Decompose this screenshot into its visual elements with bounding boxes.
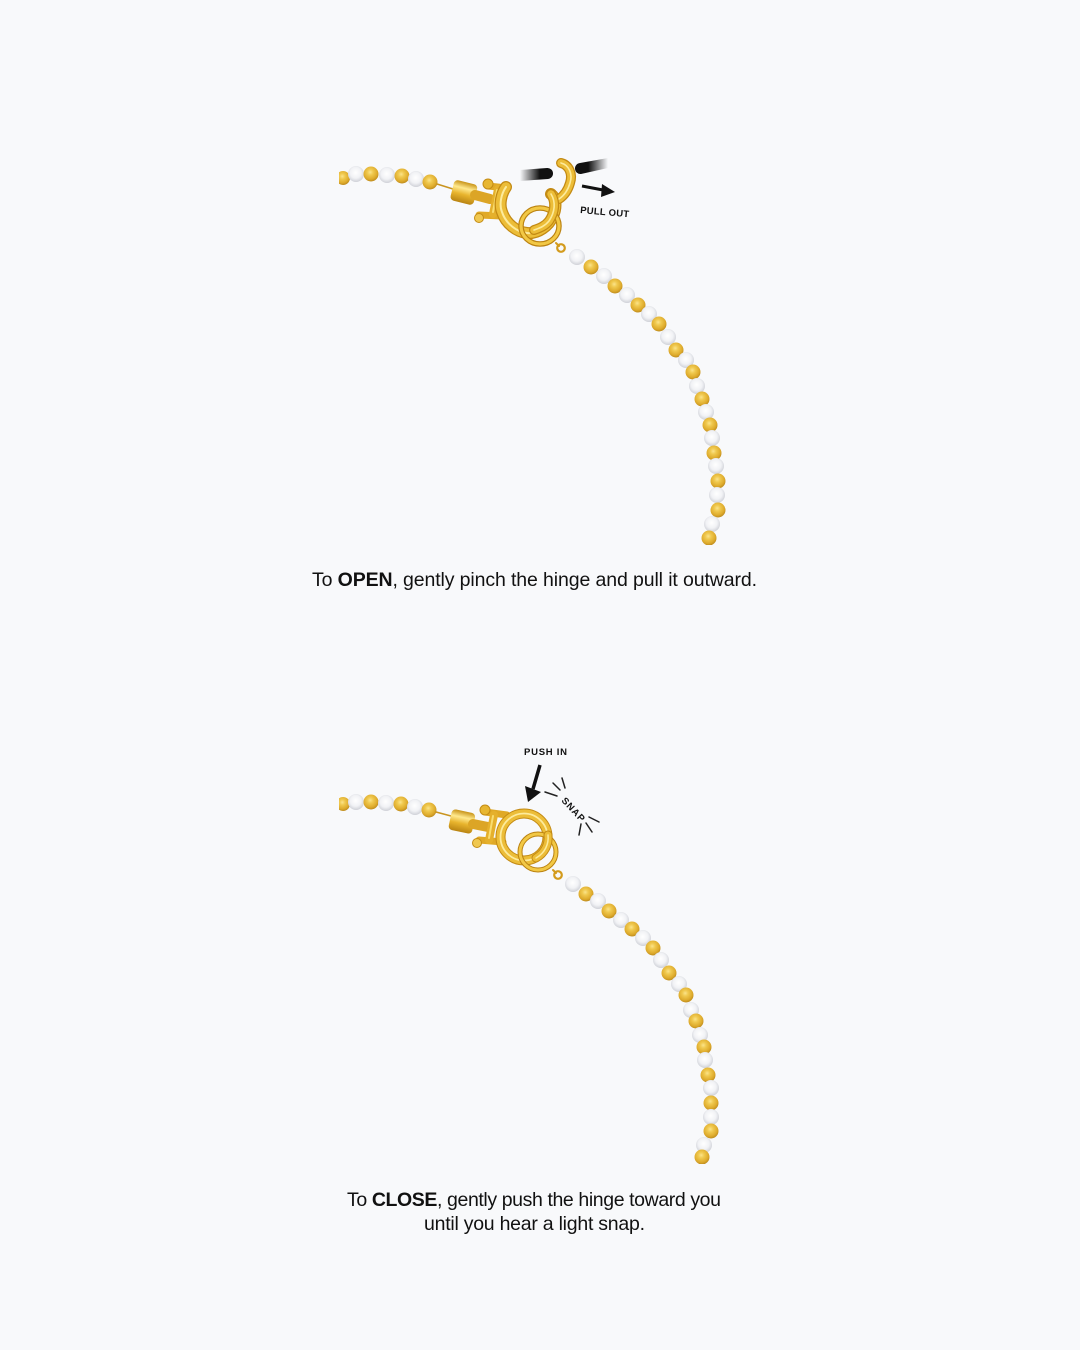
ring overlap: [536, 835, 548, 858]
hinge gate: [559, 163, 571, 199]
caption: close: To CLOSE, gently push the hinge toward you: [347, 1189, 721, 1211]
label: pull out: PULL OUT: [580, 205, 630, 220]
hook body: [501, 187, 555, 233]
caption: close: [347, 1189, 721, 1235]
caption: close: until you hear a light snap.: [424, 1213, 645, 1235]
jump ring: [521, 208, 559, 244]
arrow: pull out: [582, 184, 615, 197]
snap burst marks: [545, 778, 599, 835]
motion mark: right: [575, 158, 608, 174]
caption: open: To OPEN, gently pinch the hinge and pull it outward.: [312, 569, 757, 591]
label: push in: PUSH IN: [524, 747, 567, 758]
barrel: [448, 809, 476, 834]
hook overlap: [534, 194, 554, 230]
clasp: open: [437, 163, 571, 252]
necklace: open state: [336, 166, 726, 546]
big hinged ring: [500, 814, 548, 860]
label: snap: SNAP: [559, 796, 587, 825]
connector and bar: [474, 179, 507, 222]
barrel: [450, 179, 478, 206]
motion mark: left: [520, 168, 553, 181]
jump ring: [520, 834, 556, 870]
connector and bar: [472, 805, 507, 848]
beads: right strand: [569, 249, 726, 546]
beads: left strand: [336, 794, 436, 818]
end loop: [556, 243, 565, 252]
beads: right strand: [565, 876, 719, 1164]
clasp: closed: [436, 805, 562, 879]
necklace: closed state: [336, 794, 719, 1164]
beads: left strand: [336, 166, 438, 190]
arrow: push in: [525, 765, 541, 802]
end loop: [553, 870, 562, 879]
infographic canvas: [312, 158, 756, 1234]
